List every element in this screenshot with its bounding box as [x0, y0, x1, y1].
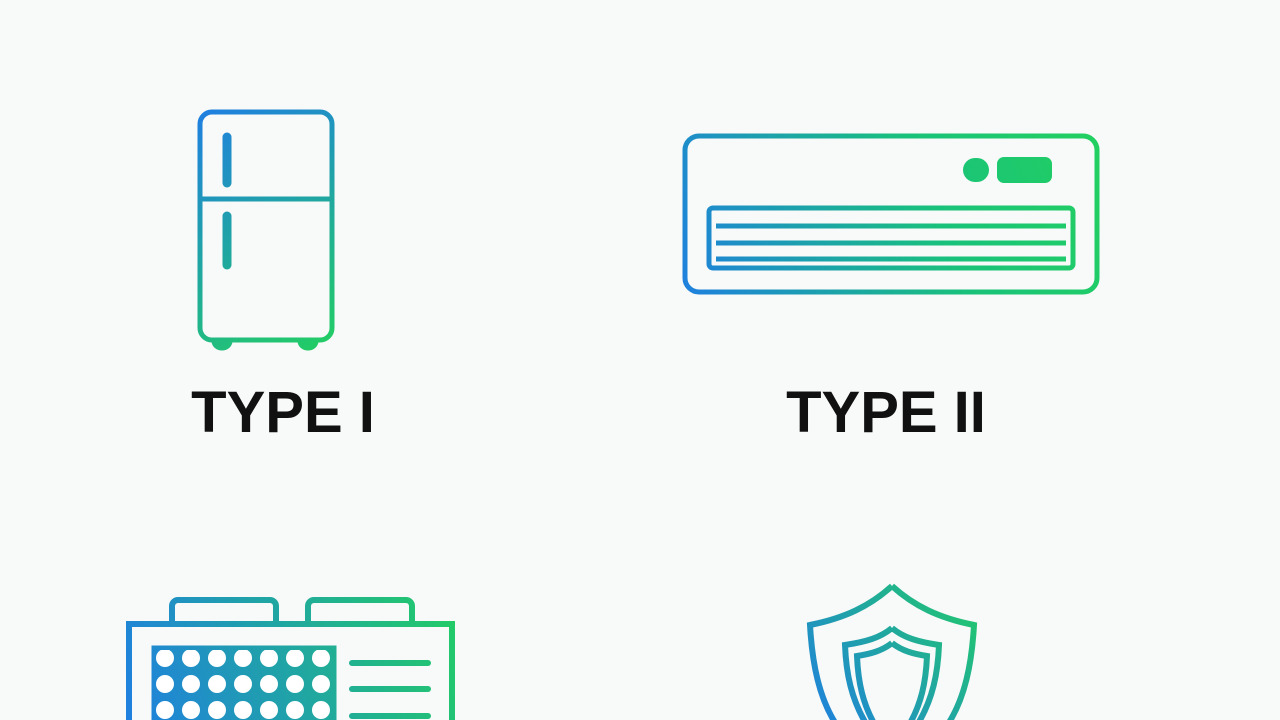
icon: refrigerator — [200, 112, 332, 348]
heading: TYPE II: TYPE II — [786, 380, 986, 445]
icon: condensing unit — [129, 600, 452, 720]
heading: TYPE I: TYPE I — [191, 380, 375, 445]
icon: air conditioner — [685, 136, 1097, 292]
icon: shield — [810, 586, 974, 720]
